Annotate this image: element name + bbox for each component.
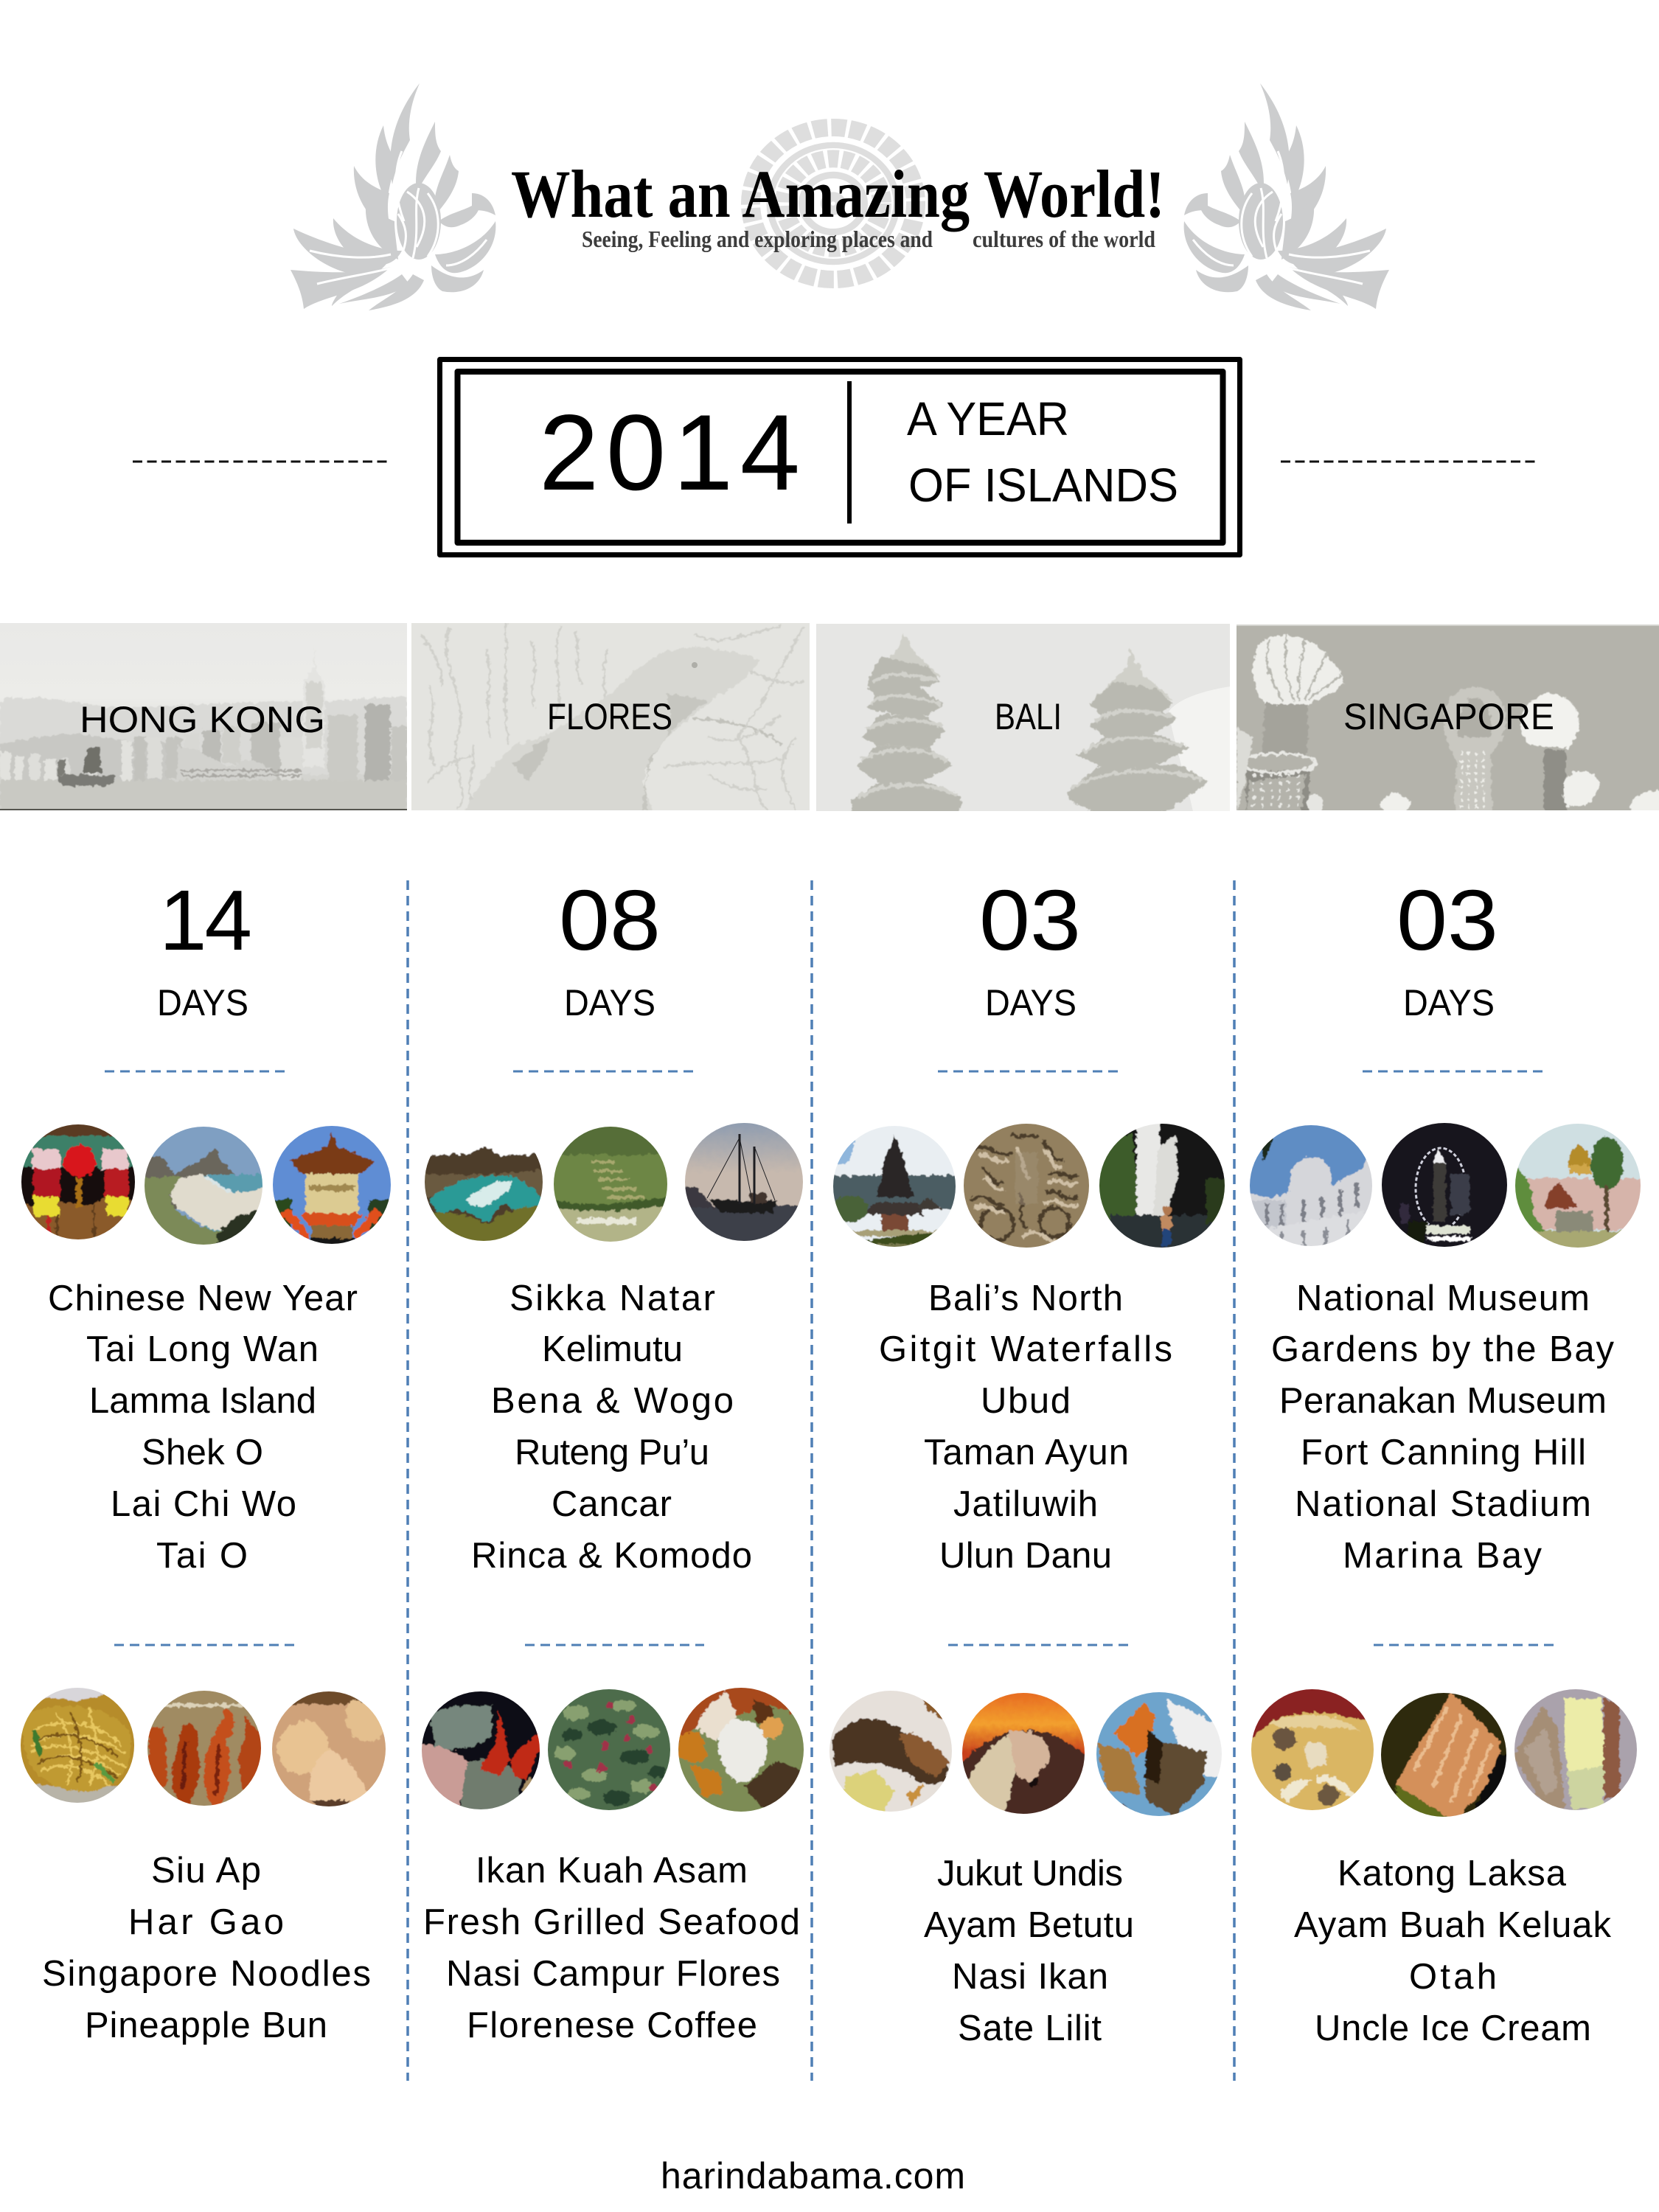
list: Flores food: Fresh Grilled Seafood bbox=[423, 1902, 800, 1942]
days: Singapore bbox=[1397, 872, 1498, 1023]
list: Hong Kong places: Chinese New Year bbox=[48, 1279, 358, 1318]
list: Bali places: Ulun Danu bbox=[939, 1536, 1112, 1576]
days: Singapore: 03 bbox=[1397, 872, 1498, 968]
list: Flores places: Cancar bbox=[552, 1484, 672, 1524]
photo: phinisi ship bbox=[685, 1123, 803, 1241]
list: Hong Kong places: Tai Long Wan bbox=[86, 1329, 319, 1369]
list: Bali places: Jatiluwih bbox=[953, 1484, 1098, 1524]
list: Bali food: Jukut Undis bbox=[937, 1854, 1123, 1893]
banner: Flores bbox=[411, 623, 810, 815]
photo: carved stone wall bbox=[964, 1124, 1089, 1248]
photo: National Museum bbox=[1250, 1125, 1372, 1246]
title line one: A YEAR bbox=[907, 392, 1069, 445]
list: Singapore places: Peranakan Museum bbox=[1279, 1381, 1607, 1421]
photo: Ayam Betutu bbox=[950, 1680, 1097, 1827]
days label: DAYS bbox=[564, 982, 655, 1023]
list: Bali places: Taman Ayun bbox=[924, 1433, 1129, 1472]
photo: Flores coffee plant bbox=[548, 1689, 670, 1810]
list: Bali food bbox=[924, 1854, 1134, 2048]
photo: Singapore Flyer at night bbox=[1382, 1123, 1507, 1247]
list: Hong Kong places: Lamma Island bbox=[89, 1381, 316, 1421]
list: Flores food bbox=[423, 1851, 800, 2045]
list: Flores places: Rinca & Komodo bbox=[471, 1536, 752, 1576]
photo: Tai Long Wan beach bbox=[145, 1127, 262, 1245]
logo: wordmark: What an Amazing World! bbox=[511, 156, 1165, 232]
list: Bali places: Bali’s North bbox=[928, 1279, 1123, 1318]
logo: tagline left part: Seeing, Feeling and exploring places and bbox=[582, 226, 933, 252]
days: Bali: 03 bbox=[979, 872, 1081, 968]
banner label: FLORES bbox=[547, 696, 672, 737]
banner label: HONG KONG bbox=[80, 699, 325, 740]
photo: grilled seafood bbox=[422, 1691, 540, 1809]
list: Hong Kong places: Shek O bbox=[142, 1433, 263, 1472]
banner: Hong Kong bbox=[0, 623, 407, 811]
days: Bali bbox=[979, 872, 1081, 1023]
list: Hong Kong food: Siu Ap bbox=[151, 1851, 261, 1891]
logo: What an Amazing World bbox=[291, 83, 1389, 310]
list: Flores places bbox=[471, 1279, 752, 1576]
logo: mandala ornament bbox=[751, 128, 916, 279]
list: Bali food: Sate Lilit bbox=[958, 2008, 1102, 2048]
days: Hong Kong bbox=[157, 872, 252, 1023]
photo: har gao bbox=[272, 1691, 386, 1806]
photo: Bena rice terraces bbox=[554, 1127, 667, 1242]
list: Bali places: Ubud bbox=[981, 1381, 1071, 1421]
list: Flores places: Kelimutu bbox=[542, 1329, 683, 1369]
list: Hong Kong places: Tai O bbox=[156, 1536, 248, 1576]
list: Singapore places bbox=[1271, 1279, 1615, 1576]
banner label: SINGAPORE bbox=[1343, 696, 1554, 737]
list: Flores food: Ikan Kuah Asam bbox=[476, 1851, 748, 1891]
list: Hong Kong food: Har Gao bbox=[128, 1902, 284, 1942]
list: Flores food: Nasi Campur Flores bbox=[446, 1954, 780, 1994]
days label: DAYS bbox=[1403, 982, 1495, 1023]
logo: right phoenix wing bbox=[1184, 83, 1389, 310]
list: Singapore places: Fort Canning Hill bbox=[1301, 1433, 1586, 1472]
list: Flores food: Florenese Coffee bbox=[467, 2006, 757, 2045]
list: Singapore food: Ayam Buah Keluak bbox=[1294, 1905, 1612, 1945]
days: Flores bbox=[559, 872, 661, 1023]
photo: Jukut Undis bbox=[830, 1691, 952, 1812]
photo: Kelimutu crater lake bbox=[425, 1146, 543, 1241]
list: Hong Kong food bbox=[42, 1851, 371, 2045]
list: Hong Kong places: Lai Chi Wo bbox=[111, 1484, 296, 1524]
list: Singapore food: Otah bbox=[1409, 1957, 1497, 1997]
title line two: OF ISLANDS bbox=[908, 459, 1178, 512]
days label: DAYS bbox=[157, 982, 248, 1023]
photo: Katong Laksa bbox=[1239, 1676, 1386, 1823]
banner: Bali bbox=[816, 624, 1235, 818]
list: Flores places: Ruteng Pu’u bbox=[515, 1433, 709, 1472]
photo: Ulun Danu temple bbox=[833, 1126, 956, 1247]
list: Singapore places: National Museum bbox=[1296, 1279, 1590, 1318]
photo: roast ducks bbox=[147, 1691, 261, 1806]
photo: Otah bbox=[1370, 1681, 1517, 1829]
list: Bali food: Nasi Ikan bbox=[952, 1957, 1108, 1997]
list: Singapore food: Katong Laksa bbox=[1338, 1854, 1567, 1893]
list: Bali food: Ayam Betutu bbox=[924, 1905, 1134, 1945]
list: Singapore food bbox=[1294, 1854, 1612, 2048]
days: Flores: 08 bbox=[559, 872, 661, 968]
photo: Nasi Campur Flores bbox=[678, 1688, 804, 1812]
title box bbox=[439, 360, 1240, 554]
list: Flores places: Bena & Wogo bbox=[491, 1381, 734, 1421]
banner: Singapore bbox=[1237, 625, 1659, 815]
list: Hong Kong places bbox=[48, 1279, 358, 1576]
list: Bali places bbox=[879, 1279, 1172, 1576]
list: Hong Kong food: Pineapple Bun bbox=[85, 2006, 327, 2045]
photo: Sultan Mosque bbox=[1515, 1124, 1641, 1248]
days: Hong Kong: 14 bbox=[159, 872, 252, 968]
list: Singapore places: National Stadium bbox=[1295, 1484, 1591, 1524]
photo: Nan Lian pagoda bbox=[273, 1126, 391, 1244]
photo: Chinese New Year lanterns bbox=[21, 1124, 135, 1239]
list: Bali places: Gitgit Waterfalls bbox=[879, 1329, 1172, 1369]
logo: tagline right part: cultures of the world bbox=[973, 226, 1155, 252]
photo: Gitgit waterfall bbox=[1099, 1124, 1225, 1248]
photo: Uncle ice cream sandwich bbox=[1502, 1676, 1649, 1823]
footer: website: harindabama.com bbox=[661, 2155, 965, 2197]
list: Singapore places: Marina Bay bbox=[1343, 1536, 1543, 1576]
logo: left phoenix wing bbox=[291, 83, 495, 310]
days label: DAYS bbox=[985, 982, 1077, 1023]
list: Flores places: Sikka Natar bbox=[509, 1279, 715, 1318]
banner label: BALI bbox=[995, 696, 1062, 737]
title year: 2014 bbox=[539, 392, 800, 512]
photo: Nasi Ikan bbox=[1085, 1680, 1233, 1828]
list: Hong Kong food: Singapore Noodles bbox=[42, 1954, 371, 1994]
photo: Singapore noodles bbox=[21, 1688, 134, 1803]
list: Singapore places: Gardens by the Bay bbox=[1271, 1329, 1615, 1369]
list: Singapore food: Uncle Ice Cream bbox=[1315, 2008, 1591, 2048]
